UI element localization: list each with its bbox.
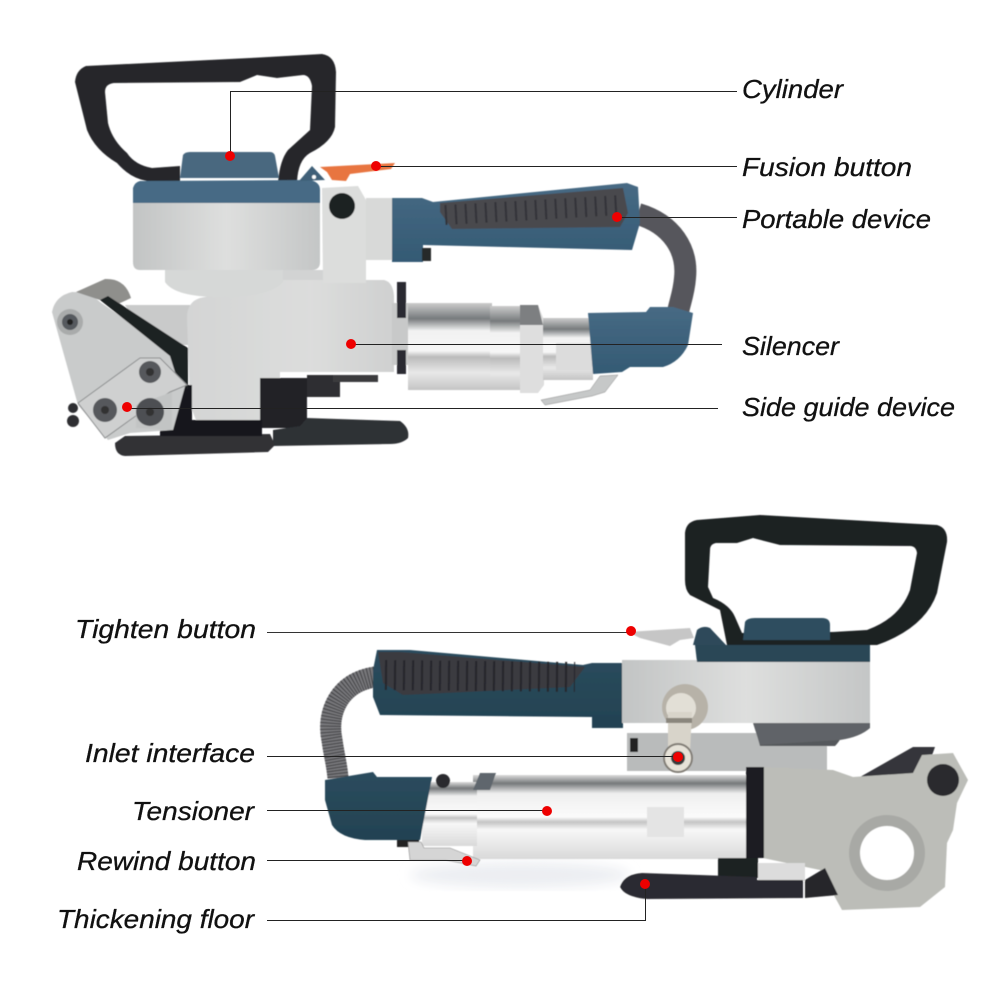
cylinder cap: [180, 152, 279, 178]
callout: Cylinder: [225, 74, 844, 161]
blue cover: [133, 180, 320, 203]
callout: Thickening floor: Thickening floor: [57, 904, 255, 934]
light bracket behind neck: [283, 270, 325, 284]
rubber grip: [378, 652, 585, 695]
grip handle: [373, 650, 623, 728]
black block: [260, 378, 307, 428]
grip handle: [392, 183, 640, 262]
bracket bolt: [329, 193, 355, 219]
end clamps: [397, 282, 406, 318]
carry handle: [75, 54, 336, 182]
main tube: [473, 775, 749, 859]
piston tube: [408, 303, 492, 390]
rubber grip: [440, 188, 628, 229]
elbow: [588, 307, 693, 374]
callout: Tighten button: Tighten button: [75, 614, 256, 644]
foot plate: [273, 418, 408, 446]
callout: Inlet interface: [85, 738, 683, 768]
cast head: [860, 747, 935, 785]
product photo: strapping tool rear view: [325, 515, 968, 910]
cover: [695, 645, 870, 662]
carry handle: [685, 515, 947, 645]
shaft: [543, 318, 593, 380]
grip ribs: [445, 205, 622, 215]
grip ribs: [385, 675, 575, 677]
rewind lever top tool: [541, 375, 618, 405]
black band: [100, 296, 188, 390]
hex nut: [520, 305, 544, 393]
callout: Silencer: [346, 331, 840, 361]
black band: [746, 767, 764, 858]
callout: Fusion button: [371, 152, 912, 182]
head side plate: [52, 292, 186, 440]
callout: Portable device: [612, 204, 931, 234]
head bridge behind body: [125, 305, 190, 345]
head bolt: [927, 764, 959, 796]
neck: [165, 268, 283, 297]
upper bracket: [627, 733, 827, 771]
callout: Portable device: Portable device: [742, 204, 931, 234]
callout: Tighten button: [75, 614, 636, 644]
callout: Tensioner: Tensioner: [132, 796, 255, 826]
ring hole: [849, 815, 925, 891]
callout: Fusion button: Fusion button: [742, 152, 912, 182]
collar: [473, 773, 496, 790]
front roller: [76, 279, 131, 304]
upper block: [133, 200, 320, 270]
lug: [299, 166, 325, 181]
elbow: [325, 772, 432, 840]
air fitting: [662, 684, 708, 730]
callout: Silencer: Silencer: [742, 331, 840, 361]
product photo: strapping tool side view: [52, 54, 693, 456]
guide body lower: [187, 280, 394, 420]
callout: Side guide device: Side guide device: [742, 392, 955, 422]
ground shadow: [410, 862, 630, 888]
callout: Thickening floor: [57, 879, 650, 934]
shaft: [422, 782, 477, 846]
cylinder cap: [743, 618, 830, 640]
dark gap at head: [160, 385, 196, 434]
callout: Inlet interface: Inlet interface: [85, 738, 255, 768]
spring coils: [331, 677, 375, 778]
callout: Side guide device: [122, 392, 955, 422]
upper block: [622, 660, 870, 723]
foot: [718, 858, 758, 878]
end disc: [392, 303, 410, 365]
callout: Cylinder: Cylinder: [742, 74, 844, 104]
rewind lever: [408, 842, 480, 866]
spring hose: [331, 677, 375, 778]
callout: Rewind button: Rewind button: [77, 846, 256, 876]
spring hose: [638, 214, 685, 312]
bolts: [57, 309, 83, 335]
callout: Tensioner: [132, 796, 552, 826]
tighten lever: [628, 628, 694, 646]
metal guide plate: [78, 358, 187, 438]
orange fusion lever: [320, 163, 395, 181]
bracket: [322, 186, 366, 283]
callout: Rewind button: [77, 846, 472, 876]
lug: [693, 627, 726, 645]
